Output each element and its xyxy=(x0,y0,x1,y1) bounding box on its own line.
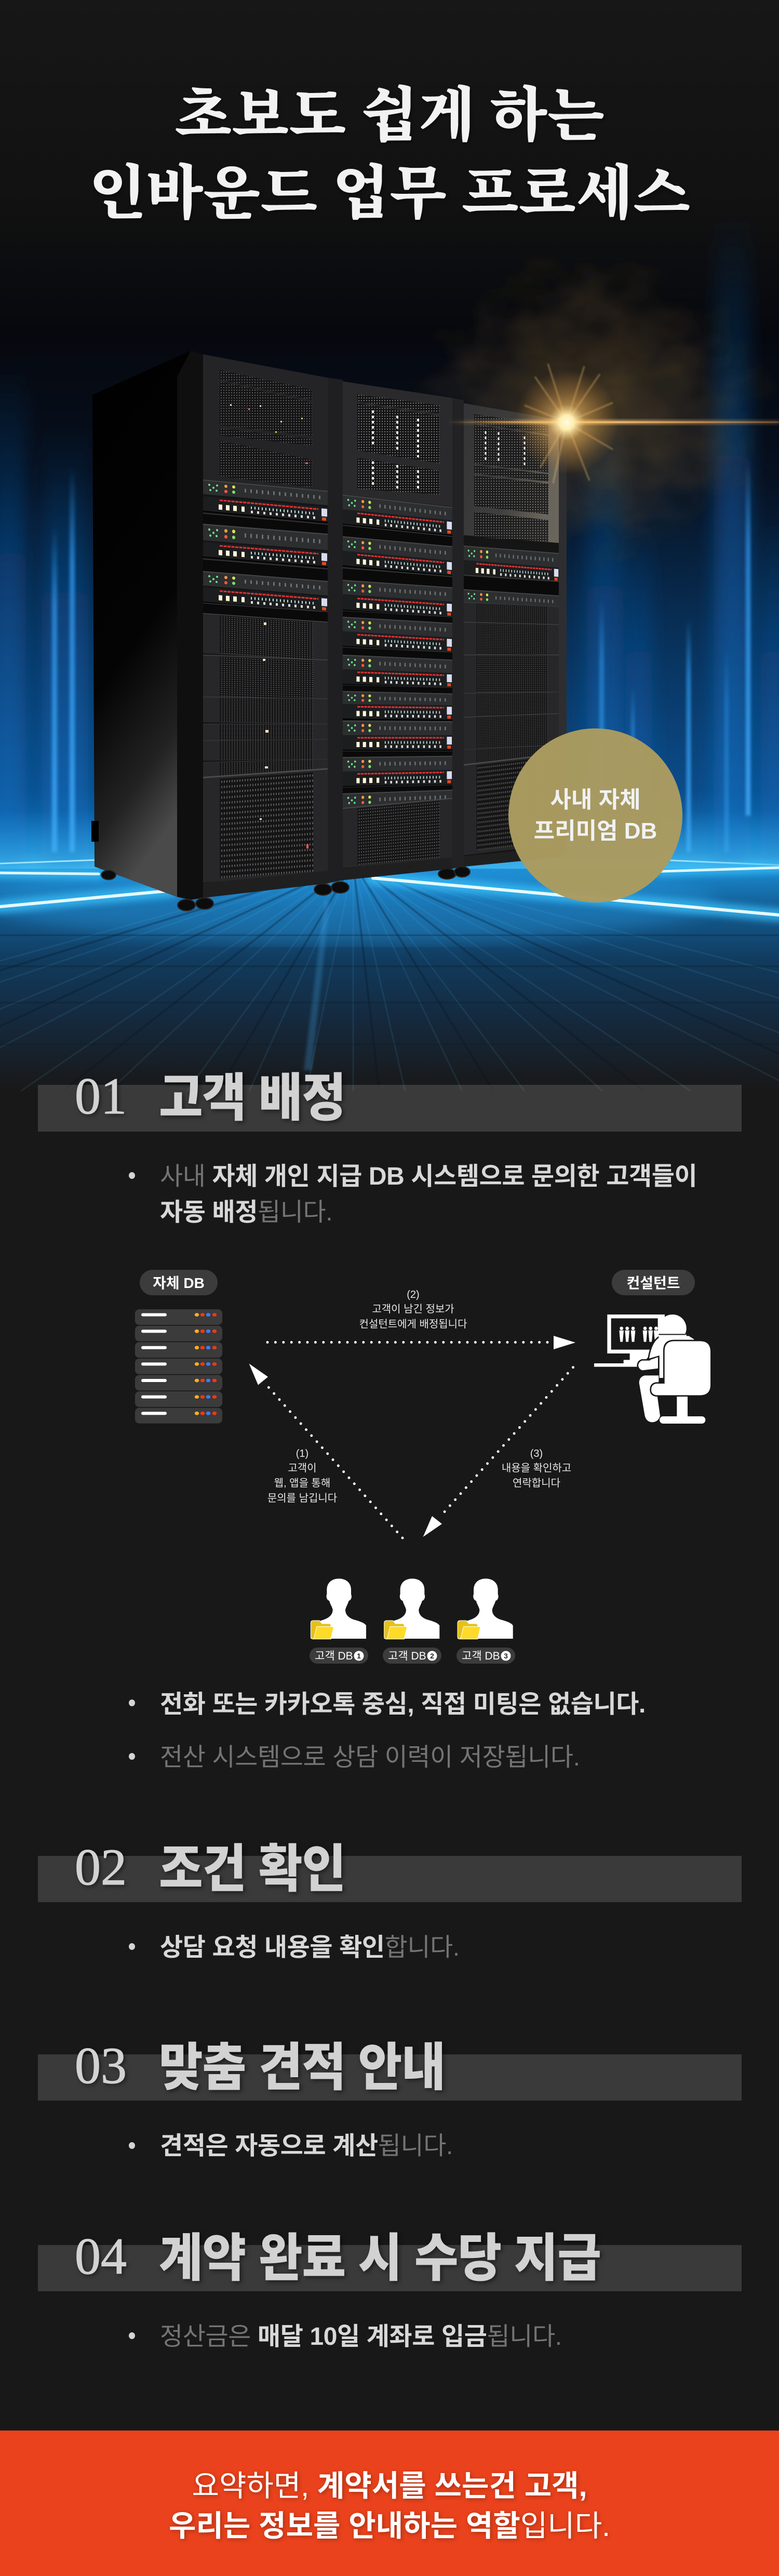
section 01 header xyxy=(38,1085,742,1132)
bullet xyxy=(129,1943,135,1950)
pill: customer DB 1: 1 xyxy=(357,1652,361,1660)
side panel xyxy=(92,351,191,900)
section 03 header xyxy=(38,2054,742,2101)
arrow: DB to consultant xyxy=(267,1336,575,1349)
horizon glow xyxy=(0,811,779,875)
page: 인바운드 업무 프로세스 xyxy=(89,161,690,227)
pill: customer DB 1 xyxy=(310,1648,368,1664)
section 01 text second line: 자동 배정됩니다. xyxy=(160,1199,332,1226)
right post xyxy=(559,420,567,857)
pill: own DB xyxy=(140,1270,218,1295)
page: 초보도 쉽게 하는 xyxy=(174,83,605,149)
section 01 text: 사내 자체 개인 지급 DB 시스템으로 문의한 고객들이 xyxy=(160,1163,697,1190)
section 03 number: 03 xyxy=(75,2037,127,2094)
glowing horizon lines xyxy=(0,860,779,915)
section 02 header xyxy=(38,1856,742,1902)
summary footer: 우리는 정보를 안내하는 역할입니다. xyxy=(169,2509,610,2543)
icon: customer 2 xyxy=(384,1578,439,1639)
hero background illustration xyxy=(0,222,779,1092)
badge: premium DB xyxy=(508,728,682,902)
section 01 number: 01 xyxy=(75,1067,127,1125)
lens flare xyxy=(447,364,779,483)
section 04 heading: 계약 완료 시 수당 지급 xyxy=(159,2230,601,2287)
section 04 header xyxy=(38,2245,742,2291)
icon: customer 1 xyxy=(311,1578,366,1639)
post between racks xyxy=(328,378,343,883)
bullet xyxy=(129,1753,135,1760)
label: step 1 xyxy=(267,1448,337,1504)
section 02 heading: 조건 확인 xyxy=(159,1841,345,1898)
bullet xyxy=(129,2142,135,2149)
rack three xyxy=(464,403,559,867)
server racks xyxy=(91,351,567,911)
diagram xyxy=(135,1270,710,1664)
rack one xyxy=(203,354,328,898)
badge: premium DB: 사내 자체 xyxy=(550,787,641,813)
icon: customer 3 xyxy=(458,1578,513,1639)
arrow: consultant to customer xyxy=(423,1367,573,1537)
label: step 3: 내용을 확인하고 xyxy=(502,1462,571,1474)
summary footer xyxy=(0,2431,779,2576)
pill: customer DB 2: 2 xyxy=(430,1652,434,1660)
label: step 1: (1) xyxy=(296,1448,308,1459)
section 03 heading: 맞춤 견적 안내 xyxy=(159,2039,445,2096)
label: step 1: 웹, 앱을 통해 xyxy=(274,1477,330,1489)
golden smoke xyxy=(415,260,769,561)
bullet xyxy=(129,1172,135,1179)
bullet xyxy=(129,1699,135,1706)
label: step 2: 고객이 남긴 정보가 xyxy=(372,1303,454,1315)
pill: customer DB 3: 3 xyxy=(504,1652,508,1660)
pill: consultant xyxy=(612,1270,695,1295)
pill: customer DB 3 xyxy=(456,1648,515,1664)
section 04 text: 정산금은 매달 10일 계좌로 입금됩니다. xyxy=(160,2323,562,2351)
summary footer: 요약하면, 계약서를 쓰는건 고객, xyxy=(192,2469,587,2503)
label: step 3: 연락합니다 xyxy=(513,1477,560,1489)
pill: customer DB 1: 고객 DB xyxy=(315,1650,353,1662)
section 04 number: 04 xyxy=(75,2227,127,2285)
icon: server stack xyxy=(135,1309,222,1424)
blue light beams xyxy=(0,208,779,873)
pill: own DB: 자체 DB xyxy=(153,1275,205,1291)
title xyxy=(89,83,690,227)
badge: premium DB: 프리미엄 DB xyxy=(534,818,657,844)
label: step 1: 고객이 xyxy=(288,1462,317,1474)
section 02 number: 02 xyxy=(75,1838,127,1896)
label: step 2: 컨설턴트에게 배정됩니다 xyxy=(359,1318,467,1330)
rack two xyxy=(343,381,452,880)
section 03 text: 견적은 자동으로 계산됩니다. xyxy=(160,2132,453,2160)
label: step 3 xyxy=(502,1448,571,1489)
label: step 2: (2) xyxy=(407,1289,420,1300)
label: step 2 xyxy=(359,1289,467,1330)
pill: customer DB 2 xyxy=(383,1648,441,1664)
corner post xyxy=(177,351,203,900)
icon: consultant at desk xyxy=(594,1314,711,1424)
sky gradient xyxy=(0,0,779,878)
pill: customer DB 2: 고객 DB xyxy=(388,1650,426,1662)
feet xyxy=(101,867,470,911)
arrow: customer to DB xyxy=(249,1363,402,1538)
label: step 3: (3) xyxy=(530,1448,543,1459)
label: step 1: 문의를 남깁니다 xyxy=(267,1492,337,1504)
note: history storage: 전산 시스템으로 상담 이력이 저장됩니다. xyxy=(160,1744,580,1771)
section 01 heading: 고객 배정 xyxy=(159,1070,345,1127)
post between racks xyxy=(452,398,464,869)
floor xyxy=(0,860,779,1091)
section 02 text: 상담 요청 내용을 확인합니다. xyxy=(160,1934,460,1961)
pill: customer DB 3: 고객 DB xyxy=(462,1650,500,1662)
pill: consultant: 컨설턴트 xyxy=(626,1275,680,1291)
note: contact channels: 전화 또는 카카오톡 중심, 직접 미팅은 없습니다. xyxy=(160,1691,646,1718)
bullet xyxy=(129,2332,135,2339)
